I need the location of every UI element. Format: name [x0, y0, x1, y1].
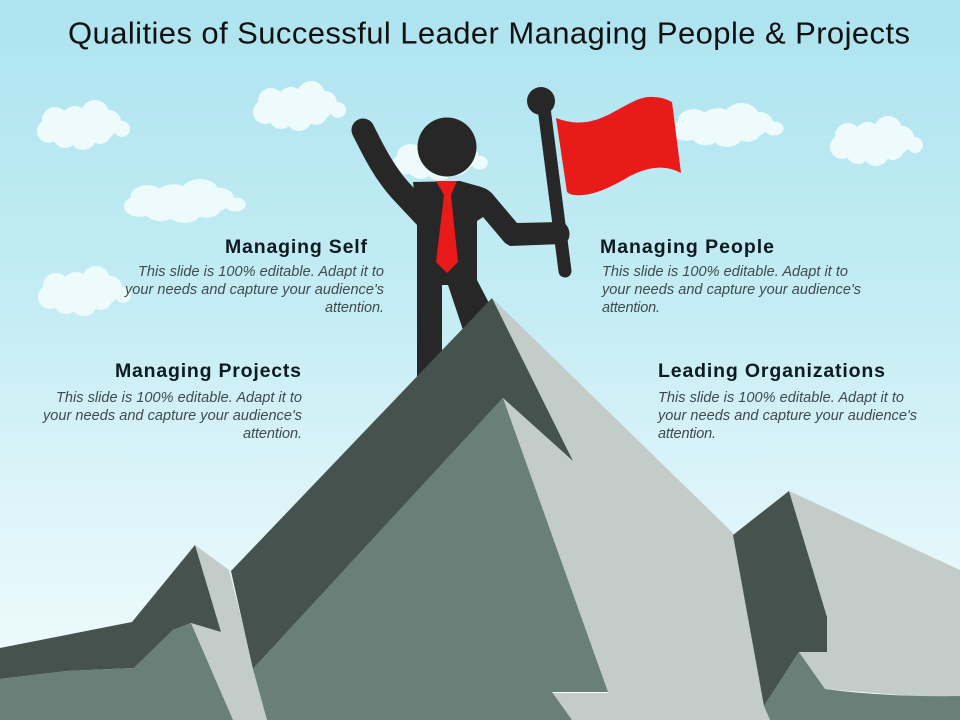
description: managing projects: your needs and capture your audience's	[42, 408, 302, 424]
red tie	[436, 181, 458, 273]
mid-green rock faces	[253, 398, 608, 720]
description: leading organizations: attention.	[658, 426, 716, 442]
description: leading organizations: your needs and capture your audience's	[657, 408, 917, 424]
raised arm	[363, 130, 430, 222]
description: managing self: This slide is 100% editable. Adapt it to	[138, 264, 384, 280]
clouds	[37, 81, 923, 316]
text block: managing people	[600, 236, 861, 316]
description: leading organizations: This slide is 100% editable. Adapt it to	[658, 390, 904, 406]
flag	[527, 87, 681, 271]
description: managing people	[601, 264, 861, 316]
heading: managing self: Managing Self	[225, 236, 368, 258]
red flag cloth	[556, 97, 681, 195]
heading: leading organizations: Leading Organizations	[658, 360, 885, 382]
flag pole	[544, 108, 565, 271]
description: managing people: This slide is 100% editable. Adapt it to	[602, 264, 848, 280]
description: managing self	[124, 264, 384, 316]
flag pole knob	[527, 87, 555, 115]
text block: managing projects	[42, 360, 302, 442]
text block: managing self	[124, 236, 384, 316]
description: managing projects	[42, 390, 302, 442]
title: Qualities of Successful Leader Managing People & Projects	[68, 16, 910, 50]
description: leading organizations	[657, 390, 917, 442]
description: managing self: attention.	[325, 300, 384, 316]
description: managing self: your needs and capture your audience's	[124, 282, 384, 298]
description: managing projects: This slide is 100% editable. Adapt it to	[56, 390, 302, 406]
figure body	[413, 181, 570, 385]
description: managing people: your needs and capture your audience's	[601, 282, 861, 298]
dark rock faces	[231, 298, 573, 669]
heading: managing people: Managing People	[600, 236, 774, 258]
light rock faces	[492, 298, 770, 720]
heading: managing projects: Managing Projects	[115, 360, 301, 382]
figure head	[418, 118, 476, 176]
leader figure	[363, 118, 570, 385]
description: managing people: attention.	[602, 300, 660, 316]
mountain	[0, 298, 960, 720]
text block: leading organizations	[657, 360, 917, 442]
description: managing projects: attention.	[243, 426, 302, 442]
